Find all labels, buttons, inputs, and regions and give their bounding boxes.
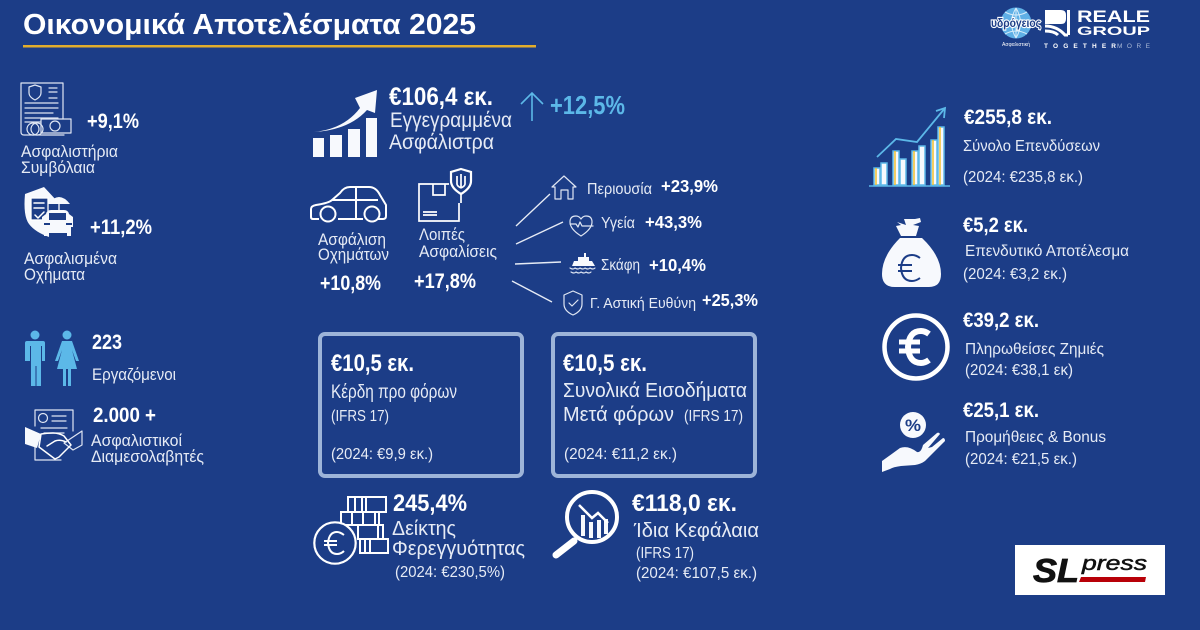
logo: Reale Group bbox=[1044, 7, 1151, 50]
item: liability: +25,3% bbox=[702, 290, 758, 310]
icon: car bbox=[311, 187, 386, 222]
icon: policy document bbox=[21, 83, 71, 135]
label: vehicles: Οχήματα bbox=[24, 266, 85, 284]
label: employees: Εργαζόμενοι bbox=[92, 366, 176, 384]
item: health: +43,3% bbox=[645, 212, 702, 232]
logo: Ydrogeios: υδρόγειος bbox=[991, 16, 1041, 30]
panel: total comprehensive income: (2024: €11,2 εκ.) bbox=[564, 446, 677, 463]
stat: commissions: €25,1 εκ. bbox=[963, 399, 1039, 422]
stat: other growth: +17,8% bbox=[414, 270, 476, 293]
note: commissions 2024: (2024: €21,5 εκ.) bbox=[965, 451, 1077, 468]
logo: Ydrogeios: Ασφαλιστική bbox=[1002, 41, 1030, 48]
stat: vehicles growth: +11,2% bbox=[90, 216, 152, 239]
note: investments 2024: (2024: €235,8 εκ.) bbox=[963, 169, 1083, 186]
note: claims 2024: (2024: €38,1 εκ) bbox=[965, 362, 1073, 379]
item: property bbox=[552, 176, 718, 199]
label: investment result: Επενδυτικό Αποτέλεσμα bbox=[965, 243, 1129, 260]
icon: up arrow bbox=[521, 93, 543, 121]
label: investments: Σύνολο Επενδύσεων bbox=[963, 138, 1100, 155]
item: health: Υγεία bbox=[601, 215, 635, 232]
logo: Reale Group: REALE bbox=[1077, 7, 1150, 26]
panel: total comprehensive income bbox=[553, 334, 755, 476]
logo: Reale Group: MORE bbox=[1117, 43, 1151, 50]
label: premiums: Εγγεγραμμένα bbox=[390, 109, 512, 132]
label: intermediaries: Ασφαλιστικοί bbox=[91, 432, 182, 450]
label: claims: Πληρωθείσες Ζημιές bbox=[965, 341, 1104, 358]
stat: claims: €39,2 εκ. bbox=[963, 309, 1039, 332]
panel: profit before tax: €10,5 εκ. bbox=[331, 350, 414, 377]
logo: SL press: press bbox=[1081, 553, 1147, 575]
icon: growth bars bbox=[313, 90, 377, 157]
note: equity IFRS: (IFRS 17) bbox=[636, 545, 694, 562]
panel: total comprehensive income: Μετά φόρων bbox=[563, 404, 674, 426]
label: solvency bbox=[392, 518, 525, 560]
label: intermediaries: Διαμεσολαβητές bbox=[91, 448, 204, 466]
icon: handshake contract bbox=[25, 410, 82, 460]
panel: insurance lines bbox=[311, 169, 758, 315]
logo: SL press bbox=[1015, 545, 1165, 595]
label: other insurance bbox=[419, 226, 497, 261]
icon: coins with euro bbox=[314, 497, 388, 564]
item: boats bbox=[570, 253, 706, 275]
stat: premiums: €106,4 εκ. bbox=[389, 83, 493, 111]
item: liability: Γ. Αστική Ευθύνη bbox=[590, 295, 696, 312]
label: equity: Ίδια Κεφάλαια bbox=[633, 520, 759, 542]
icon: magnifier chart bbox=[556, 492, 617, 555]
stat: investment result: €5,2 εκ. bbox=[963, 214, 1028, 237]
panel: profit before tax: Κέρδη προ φόρων bbox=[331, 382, 457, 403]
panel: profit before tax: (2024: €9,9 εκ.) bbox=[331, 446, 433, 463]
item: boats: Σκάφη bbox=[601, 257, 640, 274]
connector lines bbox=[512, 194, 563, 302]
label: other insurance: Ασφαλίσεις bbox=[419, 243, 497, 261]
label: policies: Ασφαλιστήρια bbox=[21, 143, 118, 161]
label: motor: Οχημάτων bbox=[318, 246, 389, 264]
logo: Reale Group: GROUP bbox=[1077, 26, 1151, 38]
panel: total comprehensive income: €10,5 εκ. bbox=[563, 350, 647, 377]
stat: policies growth: +9,1% bbox=[87, 110, 139, 133]
note: investment result 2024: (2024: €3,2 εκ.) bbox=[963, 266, 1067, 283]
label: motor bbox=[318, 231, 389, 264]
item: property: +23,9% bbox=[661, 176, 718, 196]
panel: written premiums bbox=[313, 83, 625, 157]
icon: investment chart bbox=[869, 108, 950, 186]
label: vehicles: Ασφαλισμένα bbox=[24, 250, 117, 268]
icon: employees bbox=[25, 330, 79, 386]
icon: hand with percent: % bbox=[905, 416, 921, 435]
item: health bbox=[570, 212, 702, 236]
panel: total comprehensive income: (IFRS 17) bbox=[684, 408, 743, 425]
icon: package with shield bbox=[419, 169, 471, 221]
logo: Ydrogeios bbox=[991, 8, 1041, 48]
icon: hand with percent bbox=[882, 412, 945, 472]
panel: solvency ratio bbox=[314, 490, 525, 581]
panel: profit before tax: (IFRS 17) bbox=[331, 408, 389, 425]
label: commissions: Προμήθειες & Bonus bbox=[965, 429, 1106, 446]
panel: right stats bbox=[869, 106, 1129, 472]
note: solvency 2024: (2024: €230,5%) bbox=[395, 564, 505, 581]
item: liability bbox=[564, 290, 758, 315]
label: other insurance: Λοιπές bbox=[419, 226, 465, 244]
panel: equity bbox=[556, 490, 759, 582]
label: premiums: Ασφάλιστρα bbox=[389, 131, 494, 154]
note: equity 2024: (2024: €107,5 εκ.) bbox=[636, 565, 757, 582]
stat: investments: €255,8 εκ. bbox=[964, 106, 1052, 129]
icon: money bag bbox=[882, 218, 941, 287]
label: motor: Ασφάλιση bbox=[318, 231, 386, 249]
panel: left stats bbox=[21, 83, 204, 466]
panel: total comprehensive income: Συνολικά Εισοδήματα bbox=[563, 380, 747, 402]
icon: euro circle bbox=[884, 316, 948, 378]
stat: solvency: 245,4% bbox=[393, 490, 467, 517]
stat: motor growth: +10,8% bbox=[320, 272, 381, 295]
item: property: Περιουσία bbox=[587, 181, 652, 198]
logo: Reale Group: TOGETHER bbox=[1044, 43, 1116, 50]
panel: profit before tax bbox=[320, 334, 522, 476]
icon: insured vehicle bbox=[24, 187, 73, 237]
title: Οικονομικά Αποτελέσματα 2025 bbox=[23, 9, 476, 41]
stat: intermediaries: 2.000 + bbox=[93, 404, 156, 427]
label: policies bbox=[21, 143, 118, 177]
label: intermediaries bbox=[91, 432, 204, 466]
logo: SL press: SL bbox=[1033, 552, 1079, 589]
label: solvency: Δείκτης bbox=[392, 518, 456, 540]
label: solvency: Φερεγγυότητας bbox=[392, 538, 525, 560]
label: vehicles bbox=[24, 250, 117, 284]
item: boats: +10,4% bbox=[649, 255, 706, 275]
stat: equity: €118,0 εκ. bbox=[632, 490, 737, 517]
stat: premiums growth: +12,5% bbox=[550, 90, 625, 120]
stat: employees: 223 bbox=[92, 331, 122, 354]
label: policies: Συμβόλαια bbox=[21, 159, 95, 177]
label: premiums bbox=[389, 109, 512, 154]
